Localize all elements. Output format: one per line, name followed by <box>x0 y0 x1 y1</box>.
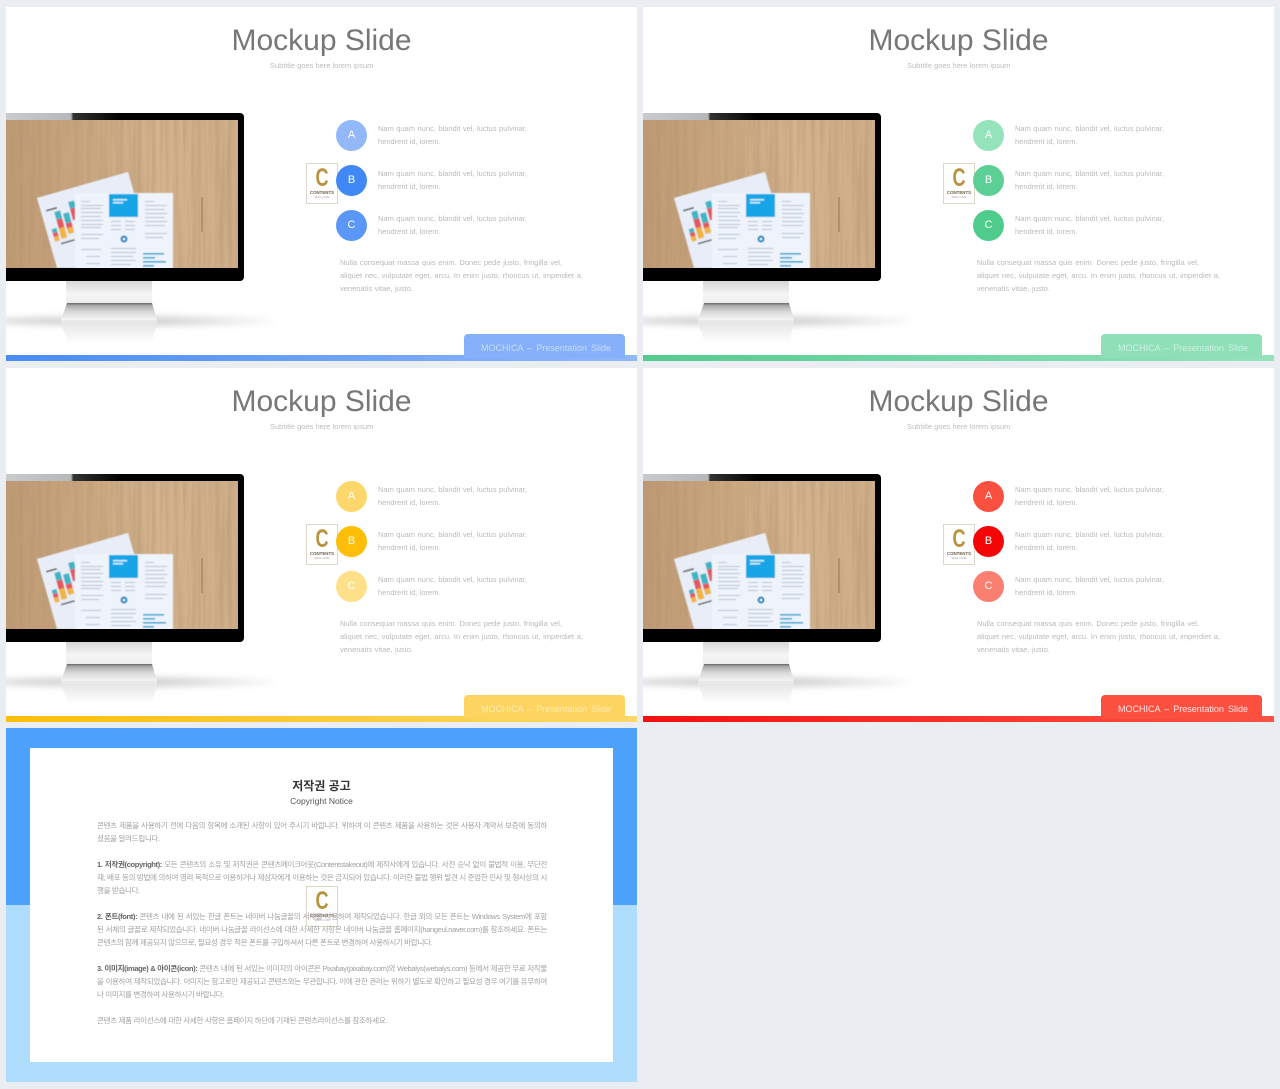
item B: Nam quam nunc, blandit vel, luctus pulvinar, <box>378 169 527 178</box>
section 1 copyright: 1. 저작권(copyright): 모든 콘텐츠의 소유 및 저작권은 콘텐츠메이크아웃(Contentstakeout)에 제작사에게 있습니다. 사전 승낙 없이 불법적 이용, 무단전 <box>97 860 547 869</box>
item A <box>336 120 527 151</box>
item A: hendrerit id, lorem. <box>378 137 441 146</box>
subtitle: Subtitle goes here lorem ipsum <box>270 422 373 431</box>
item A: Nam quam nunc, blandit vel, luctus pulvinar, <box>1015 485 1164 494</box>
item B: B <box>348 174 355 186</box>
item A: hendrerit id, lorem. <box>378 498 441 507</box>
item C: hendrerit id, lorem. <box>378 588 441 597</box>
footer tab <box>464 695 625 719</box>
logo badge: C <box>315 164 329 192</box>
monitor mockup image <box>6 113 256 336</box>
bottom bar <box>6 355 637 360</box>
body paragraph <box>340 258 583 293</box>
intro text: 콘텐츠 제품을 사용하기 전에 다음의 항목에 소개된 사항이 있어 주시기 바랍니다. 위하여 이 콘텐츠 제품을 사용하는 것은 사용자 계약서 보증에 동의하 <box>97 821 547 830</box>
item B: B <box>985 535 992 547</box>
item B <box>336 165 527 196</box>
section 2 font: 된 서체의 글꼴로 제작되었습니다. 네이버 나눔글꼴 라이선스에 대한 사세한 사항은 네이버 나눔글꼴 홈페이지(hangeul.naver.com)를 참조하세요. 폰트는 <box>97 925 547 934</box>
item B <box>973 526 1164 557</box>
section 1 copyright: 행을 받습니다. <box>97 886 140 895</box>
section 2 font: 2. 폰트(font): 콘텐츠 내에 된 서있는 한글 폰트는 네이버 나눔글꼴의 서체를 사용하여 제작되었습니다. 한글 외의 모든 폰트는 Windows System에 포함 <box>97 912 547 921</box>
bottom bar <box>6 716 637 722</box>
title: Mockup Slide <box>231 24 412 57</box>
logo badge: C <box>952 525 966 553</box>
item B: Nam quam nunc, blandit vel, luctus pulvinar, <box>378 530 527 539</box>
item C: Nam quam nunc, blandit vel, luctus pulvinar, <box>378 214 527 223</box>
section 2 font <box>97 912 547 947</box>
title: Mockup Slide <box>231 385 412 418</box>
item A: A <box>985 129 992 141</box>
body paragraph: aliquet nec, vulputate eget, arcu. In enim justo, rhoncus ut, imperdiet a, <box>340 632 583 641</box>
logo badge: MAIL.COM <box>315 556 329 560</box>
logo badge: MAIL.COM <box>952 195 966 199</box>
intro text: 셨음을 알려드립니다. <box>97 834 160 843</box>
item B <box>973 165 1164 196</box>
panel: red slide <box>643 368 1274 722</box>
logo badge: MAIL.COM <box>315 918 329 922</box>
item A: Nam quam nunc, blandit vel, luctus pulvinar, <box>378 124 527 133</box>
item A: Nam quam nunc, blandit vel, luctus pulvinar, <box>378 485 527 494</box>
body paragraph: venenatis vitae, justo. <box>977 284 1050 293</box>
body paragraph <box>977 258 1220 293</box>
item A: hendrerit id, lorem. <box>1015 498 1078 507</box>
section 2 font: 콘텐츠의 함께 제공되지 않으므로, 필요성 경우 적은 폰트를 구입하셔서 다른 폰트로 변경하여 사용하시기 바랍니다. <box>97 938 432 947</box>
item A: A <box>348 129 355 141</box>
title: Mockup Slide <box>868 385 1049 418</box>
logo badge <box>943 524 975 565</box>
title: Mockup Slide <box>868 24 1049 57</box>
panel: yellow slide <box>6 368 637 722</box>
item A: hendrerit id, lorem. <box>1015 137 1078 146</box>
item A <box>336 481 527 512</box>
item C: Nam quam nunc, blandit vel, luctus pulvinar, <box>1015 575 1164 584</box>
monitor mockup image <box>6 474 256 698</box>
body paragraph: venenatis vitae, justo. <box>977 645 1050 654</box>
body paragraph: venenatis vitae, justo. <box>340 284 413 293</box>
section 3 image and icon <box>97 964 547 999</box>
item C: hendrerit id, lorem. <box>1015 227 1078 236</box>
body paragraph: aliquet nec, vulputate eget, arcu. In enim justo, rhoncus ut, imperdiet a, <box>340 271 583 280</box>
body paragraph: aliquet nec, vulputate eget, arcu. In enim justo, rhoncus ut, imperdiet a, <box>977 271 1220 280</box>
logo badge: CONTENTS <box>947 551 971 556</box>
item B: B <box>348 535 355 547</box>
logo badge: MAIL.COM <box>315 195 329 199</box>
item B: Nam quam nunc, blandit vel, luctus pulvinar, <box>1015 169 1164 178</box>
body paragraph: Nulla consequat massa quis enim. Donec pede justo, fringilla vel, <box>340 619 562 628</box>
body paragraph: Nulla consequat massa quis enim. Donec pede justo, fringilla vel, <box>340 258 562 267</box>
logo badge <box>306 886 338 927</box>
body paragraph: Nulla consequat massa quis enim. Donec pede justo, fringilla vel, <box>977 619 1199 628</box>
footer tab: MOCHICA – Presentation Slide <box>481 704 611 714</box>
logo badge: C <box>315 887 329 915</box>
item C: C <box>348 219 355 231</box>
panel: blue slide <box>6 7 637 361</box>
logo badge: CONTENTS <box>947 190 971 195</box>
logo badge: CONTENTS <box>310 551 334 556</box>
logo badge: C <box>952 164 966 192</box>
item C: hendrerit id, lorem. <box>378 227 441 236</box>
item B: hendrerit id, lorem. <box>378 543 441 552</box>
item B: hendrerit id, lorem. <box>1015 543 1078 552</box>
item B <box>336 526 527 557</box>
license note: 콘텐츠 제품 라이선스에 대한 사세한 사항은 홈페이지 하단에 기재된 콘텐츠라이선스를 참조하세요. <box>97 1016 387 1025</box>
item C <box>973 571 1164 602</box>
intro text <box>97 821 547 843</box>
item C <box>336 571 527 602</box>
notice sheet <box>30 748 613 1062</box>
item C: C <box>348 580 355 592</box>
section 1 copyright: 재, 배포 등의 방법에 의하여 영리 목적으로 이용하거나 제삼자에게 이용하는 것은 금지되어 있습니다. 이러한 불법 행위 발견 시 준엄한 민사 및 형사상의 시 <box>97 873 547 882</box>
subtitle: Subtitle goes here lorem ipsum <box>270 61 373 70</box>
item B: hendrerit id, lorem. <box>378 182 441 191</box>
body paragraph <box>977 619 1220 654</box>
section 3 image and icon: 3. 이미지(image) & 아이콘(icon): 콘텐츠 내에 된 서있는 이미지의 아이콘은 Pixabay(pixabay.com)와 Webalys(webalys.com) 등에서 제공한 무료 저작물 <box>97 964 547 973</box>
item B: Nam quam nunc, blandit vel, luctus pulvinar, <box>1015 530 1164 539</box>
body paragraph: aliquet nec, vulputate eget, arcu. In enim justo, rhoncus ut, imperdiet a, <box>977 632 1220 641</box>
item A: A <box>348 490 355 502</box>
bottom bar <box>643 355 1274 360</box>
panel: copyright notice <box>6 728 637 1082</box>
body paragraph <box>340 619 583 654</box>
item A <box>973 481 1164 512</box>
subtitle: Subtitle goes here lorem ipsum <box>907 61 1010 70</box>
subtitle: Subtitle goes here lorem ipsum <box>907 422 1010 431</box>
notice heading: 저작권 공고 <box>292 779 351 793</box>
footer tab <box>1101 334 1262 358</box>
bottom bar <box>643 716 1274 722</box>
logo badge <box>306 524 338 565</box>
item B: B <box>985 174 992 186</box>
footer tab <box>1101 695 1262 719</box>
logo badge <box>306 163 338 204</box>
item C <box>336 210 527 241</box>
item C: Nam quam nunc, blandit vel, luctus pulvinar, <box>1015 214 1164 223</box>
section 1 copyright <box>97 860 547 895</box>
panel: green slide <box>643 7 1274 361</box>
footer tab: MOCHICA – Presentation Slide <box>1118 704 1248 714</box>
logo badge <box>943 163 975 204</box>
logo badge: CONTENTS <box>310 190 334 195</box>
item A: Nam quam nunc, blandit vel, luctus pulvinar, <box>1015 124 1164 133</box>
item C: hendrerit id, lorem. <box>1015 588 1078 597</box>
monitor mockup image <box>643 474 894 698</box>
section 3 image and icon: 나 이미지를 변경하여 사용하시기 바랍니다. <box>97 990 224 999</box>
footer tab <box>464 334 625 358</box>
item C: C <box>985 219 992 231</box>
body paragraph: venenatis vitae, justo. <box>340 645 413 654</box>
section 3 image and icon: 을 이용하여 제작되었습니다. 이미지는 참고로만 제공되고 콘텐츠와는 무관합니다. 이에 관한 권리는 위하기 별도로 확인하고 필요성 경우 여기를 유무하여 <box>97 977 547 986</box>
body paragraph: Nulla consequat massa quis enim. Donec pede justo, fringilla vel, <box>977 258 1199 267</box>
item A: A <box>985 490 992 502</box>
logo badge: C <box>315 525 329 553</box>
footer tab: MOCHICA – Presentation Slide <box>1118 343 1248 353</box>
logo badge: MAIL.COM <box>952 556 966 560</box>
item A <box>973 120 1164 151</box>
item C: Nam quam nunc, blandit vel, luctus pulvinar, <box>378 575 527 584</box>
notice subheading: Copyright Notice <box>290 796 353 806</box>
footer tab: MOCHICA – Presentation Slide <box>481 343 611 353</box>
item C <box>973 210 1164 241</box>
item C: C <box>985 580 992 592</box>
monitor mockup image <box>643 113 894 336</box>
logo badge: CONTENTS <box>310 913 334 918</box>
item B: hendrerit id, lorem. <box>1015 182 1078 191</box>
